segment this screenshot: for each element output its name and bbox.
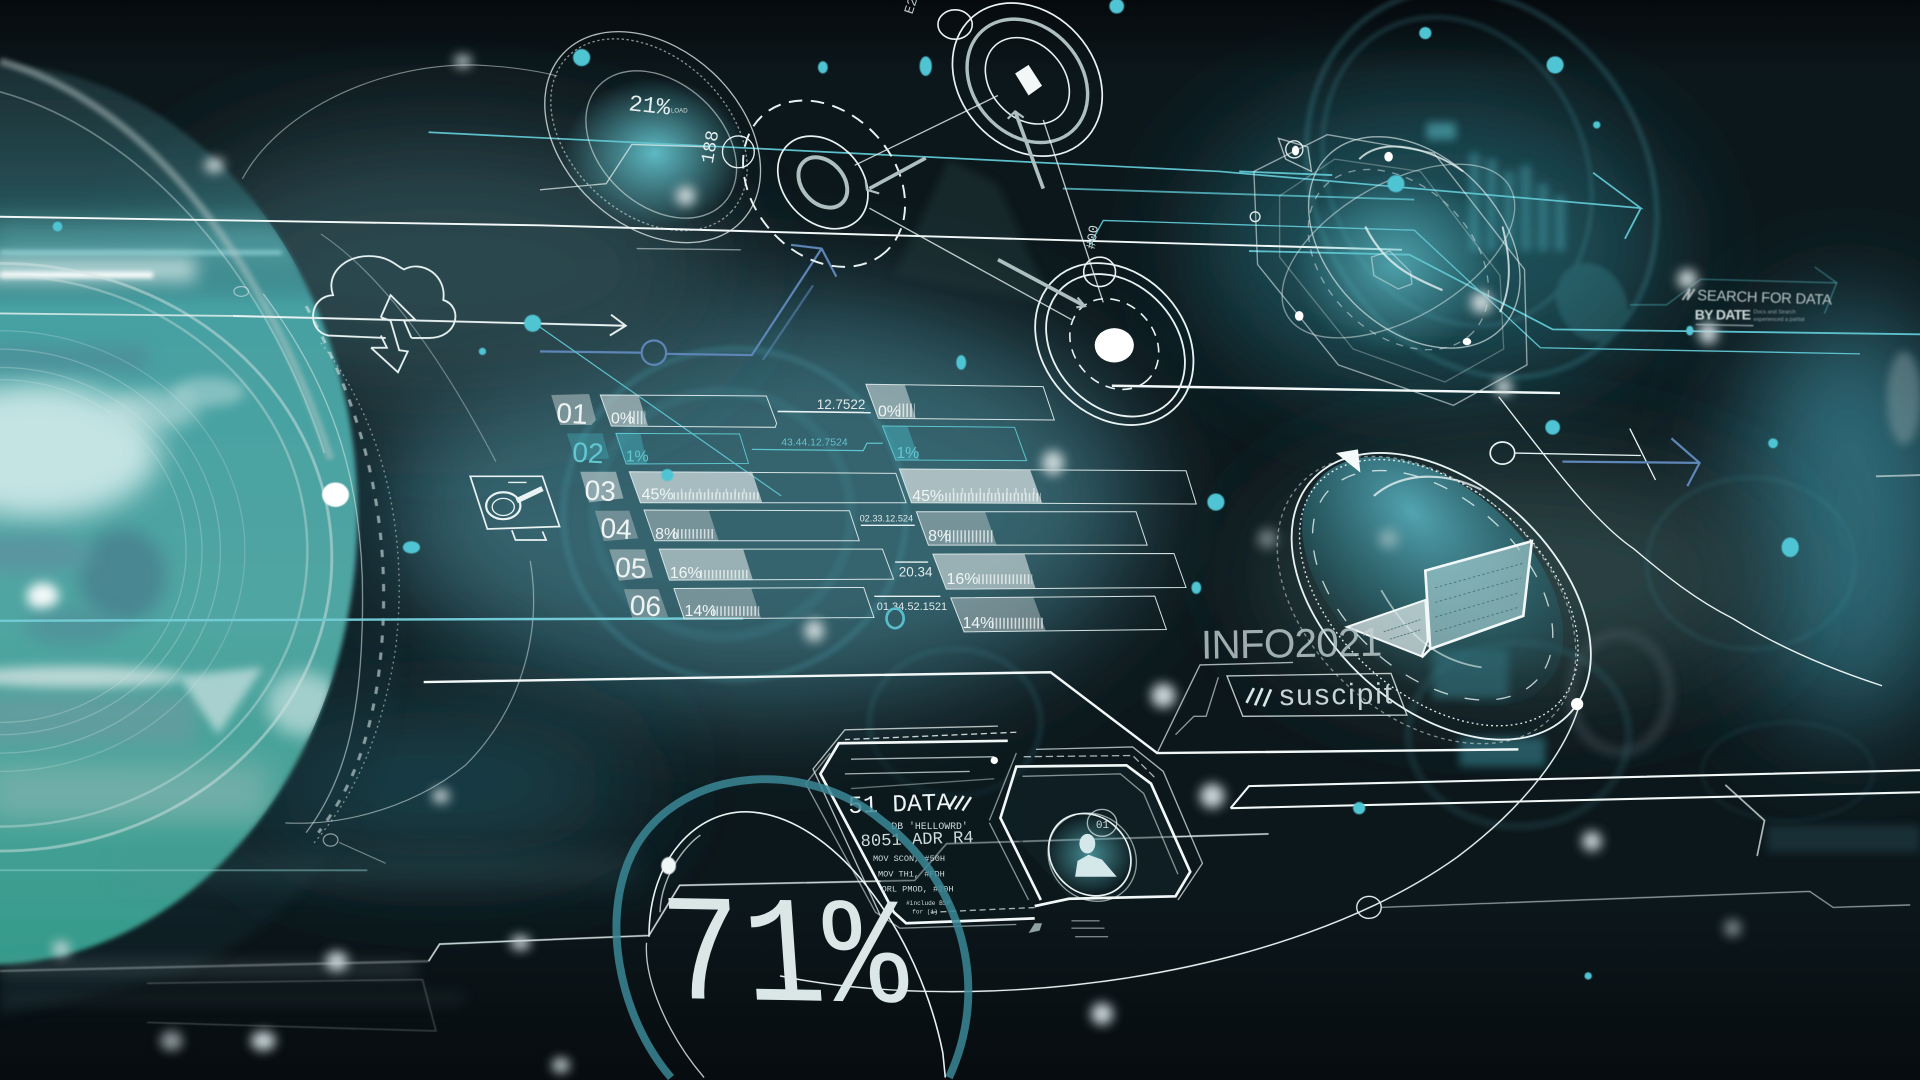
bar annotations: 01.34.52.1521 bbox=[877, 601, 947, 613]
bars: right column bbox=[866, 384, 1196, 632]
row numbers: 05 bbox=[614, 552, 647, 584]
wireframe sphere: top right bbox=[1250, 95, 1561, 405]
panel code lines: #include BSP bbox=[906, 900, 950, 907]
globe outer halo bbox=[0, 196, 401, 1016]
globe bbox=[0, 64, 358, 965]
bar annotations: 43.44.12.7524 bbox=[781, 438, 848, 449]
row 05 right bbox=[933, 553, 1186, 589]
bar annotations: 12.7522 bbox=[817, 397, 865, 412]
person icon bbox=[1075, 834, 1117, 877]
bar percentages: 8% bbox=[928, 528, 951, 545]
row 03 left bbox=[580, 472, 906, 503]
panel title: 51 DATA bbox=[848, 790, 952, 821]
node: top diamond bbox=[922, 0, 1133, 187]
INFO2021 label: INFO2021 bbox=[1201, 619, 1383, 668]
panel code lines: DB 'HELLOWRD' bbox=[891, 821, 968, 832]
panel code lines: for (i) bbox=[912, 908, 938, 915]
bar percentages: 8% bbox=[655, 526, 678, 543]
panel code lines: MOV SCON, #50H bbox=[873, 854, 945, 864]
row 05 left bbox=[609, 549, 894, 581]
cloud sync icon with arrow bbox=[233, 256, 626, 372]
gauge value small: LOAD bbox=[671, 108, 688, 115]
right circle arrow bbox=[1490, 429, 1700, 486]
panel code lines bbox=[860, 821, 974, 915]
row 02 left bbox=[567, 433, 749, 464]
row 01 right bbox=[866, 384, 1054, 420]
suscipit tag bbox=[1227, 673, 1407, 716]
panel title hash bbox=[949, 796, 971, 811]
small rotated code labels bbox=[903, 0, 1103, 250]
row numbers: 06 bbox=[629, 590, 662, 622]
blue arrow path bbox=[540, 245, 836, 365]
bar percentages: 1% bbox=[896, 445, 919, 462]
search subheading: BY DATE bbox=[1695, 307, 1751, 323]
panel code lines: 8051 ADR R4 bbox=[860, 829, 974, 852]
row numbers: 03 bbox=[584, 475, 617, 507]
search hash mark bbox=[1682, 289, 1695, 300]
small rotated code labels: #00 bbox=[1085, 224, 1103, 250]
bar annotations bbox=[752, 397, 947, 628]
bar percentages bbox=[611, 403, 994, 632]
blurred background chart bbox=[1427, 122, 1565, 251]
row 04 left bbox=[595, 510, 859, 541]
row 02 right bbox=[882, 426, 1027, 461]
thin teal diagonal bbox=[533, 322, 781, 496]
row numbers: 02 bbox=[572, 437, 604, 469]
panel code lines: ORL PMOD, #20H bbox=[882, 884, 954, 894]
network nodes bbox=[710, 0, 1226, 457]
globe orbit rings bbox=[0, 61, 557, 863]
row numbers: 01 bbox=[556, 397, 589, 430]
laptop sphere bbox=[1221, 396, 1646, 801]
bar percentages: 45% bbox=[642, 487, 673, 504]
bar percentages: 14% bbox=[962, 615, 994, 632]
bar percentages: 14% bbox=[684, 603, 716, 620]
bar percentages: 0% bbox=[611, 411, 634, 428]
gauge value: 21% bbox=[627, 91, 672, 122]
background glows bbox=[159, 98, 1920, 857]
row 03 right bbox=[899, 469, 1196, 504]
bars: left column bbox=[551, 394, 906, 619]
row 01 left bbox=[551, 394, 777, 427]
tag text: suscipit bbox=[1279, 677, 1392, 712]
search description: Docs and Search bbox=[1753, 309, 1796, 315]
search for data panel bbox=[1630, 267, 1837, 326]
panel code lines: MOV TH1, #FDH bbox=[878, 870, 945, 880]
data code panel bbox=[806, 726, 1038, 928]
gauge rotated number: 188 bbox=[698, 129, 724, 165]
bar annotations: 20.34 bbox=[899, 565, 933, 580]
bar percentages: 16% bbox=[670, 565, 702, 582]
INFO2021 label bbox=[1157, 619, 1383, 753]
dim shapes under laptop bbox=[1433, 351, 1920, 852]
globe light streaks bbox=[0, 251, 637, 1002]
connectors bbox=[855, 96, 1103, 320]
globe node bbox=[322, 482, 349, 507]
row numbers: 04 bbox=[600, 513, 633, 545]
row 06 left bbox=[624, 587, 874, 619]
search heading: SEARCH FOR DATA bbox=[1697, 288, 1832, 309]
bar percentages: 16% bbox=[947, 571, 978, 588]
user profile panel bbox=[989, 747, 1202, 937]
row numbers bbox=[556, 397, 662, 622]
bar percentages: 1% bbox=[626, 449, 649, 466]
blurred depth shapes bbox=[563, 0, 1873, 827]
rotation marker bbox=[1336, 449, 1360, 473]
monitor search icon bbox=[470, 476, 560, 540]
71% dial bbox=[616, 779, 968, 1078]
bar percentages: 45% bbox=[912, 488, 944, 505]
row 04 right bbox=[916, 512, 1147, 545]
badge number: 01 bbox=[1096, 820, 1110, 832]
node: lower white bbox=[1003, 231, 1226, 457]
tag hash marks bbox=[1247, 688, 1271, 707]
bar percentages: 0% bbox=[878, 403, 901, 420]
laptop icon bbox=[1347, 541, 1532, 658]
node: centre ring bbox=[710, 68, 938, 299]
bar annotations: 02.33.12.524 bbox=[860, 514, 913, 524]
data bars panel bbox=[551, 384, 1196, 632]
globe clouds and continents bbox=[0, 220, 340, 820]
dial value: 71% bbox=[656, 871, 914, 1048]
row 06 right bbox=[951, 596, 1166, 632]
mini bar charts bbox=[629, 410, 1043, 623]
search description line 2: experienced a partial bbox=[1753, 317, 1805, 323]
dark triangle backdrop bbox=[894, 159, 1053, 306]
gauge: 21% load bbox=[503, 0, 802, 285]
